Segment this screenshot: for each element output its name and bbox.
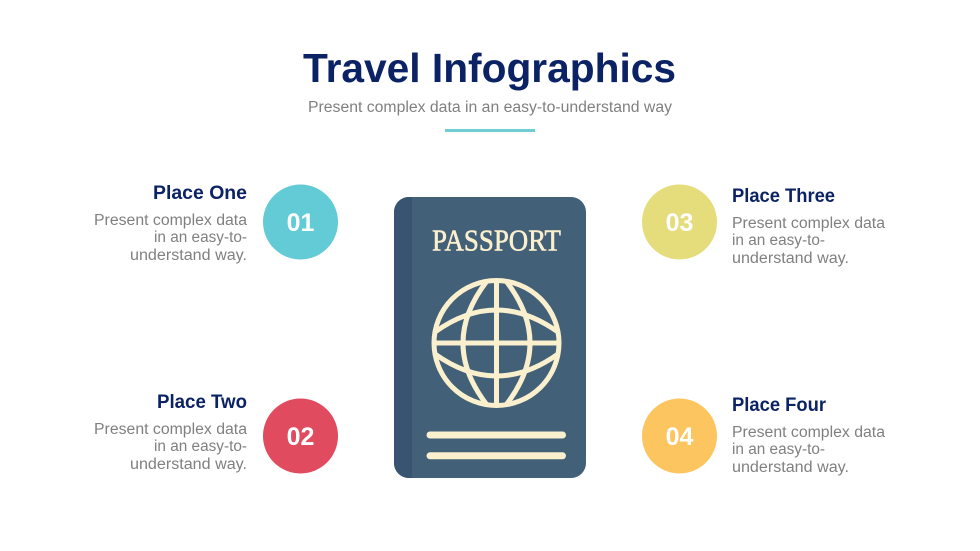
number badge 02: [263, 398, 338, 474]
passport spine: [394, 197, 412, 478]
heading: place two: Place Two: [157, 392, 247, 413]
panel: place two: [94, 392, 338, 474]
icon: passport: [394, 197, 586, 478]
text block: place four: Present complex data: [732, 424, 885, 441]
panel: place three: [642, 184, 885, 267]
panel: place one: [94, 183, 338, 264]
panel: place four: [642, 395, 885, 476]
text block: place three: understand way.: [732, 250, 849, 267]
text block: place two: Present complex data: [94, 421, 247, 438]
number badge 02: 02: [287, 423, 314, 451]
text block: place three: in an easy-to-: [732, 232, 825, 249]
subtitle: Present complex data in an easy-to-understand way: [308, 99, 672, 116]
text block: place four: in an easy-to-: [732, 441, 825, 458]
number badge 04: [642, 398, 717, 474]
text block: place two: understand way.: [130, 456, 247, 473]
text block: place one: Present complex data: [94, 212, 247, 229]
number badge 01: [263, 184, 338, 260]
text block: place four: understand way.: [732, 459, 849, 476]
icon: globe: [434, 280, 559, 406]
heading: place one: Place One: [153, 183, 247, 204]
number badge 04: 04: [666, 423, 693, 451]
text block: place three: Present complex data: [732, 215, 885, 232]
heading: place four: Place Four: [732, 395, 827, 416]
text block: place two: in an easy-to-: [154, 438, 247, 455]
number badge 03: [642, 184, 717, 260]
title accent rule: [445, 129, 535, 132]
passport lines: [426, 432, 566, 459]
heading: place three: Place Three: [732, 186, 835, 207]
text block: place one: understand way.: [130, 247, 247, 264]
number badge 01: 01: [287, 209, 314, 237]
title: Travel Infographics: [303, 45, 676, 91]
text block: place one: in an easy-to-: [154, 229, 247, 246]
passport cover: [394, 197, 586, 478]
passport label: PASSPORT: [432, 222, 561, 258]
number badge 03: 03: [666, 209, 693, 237]
